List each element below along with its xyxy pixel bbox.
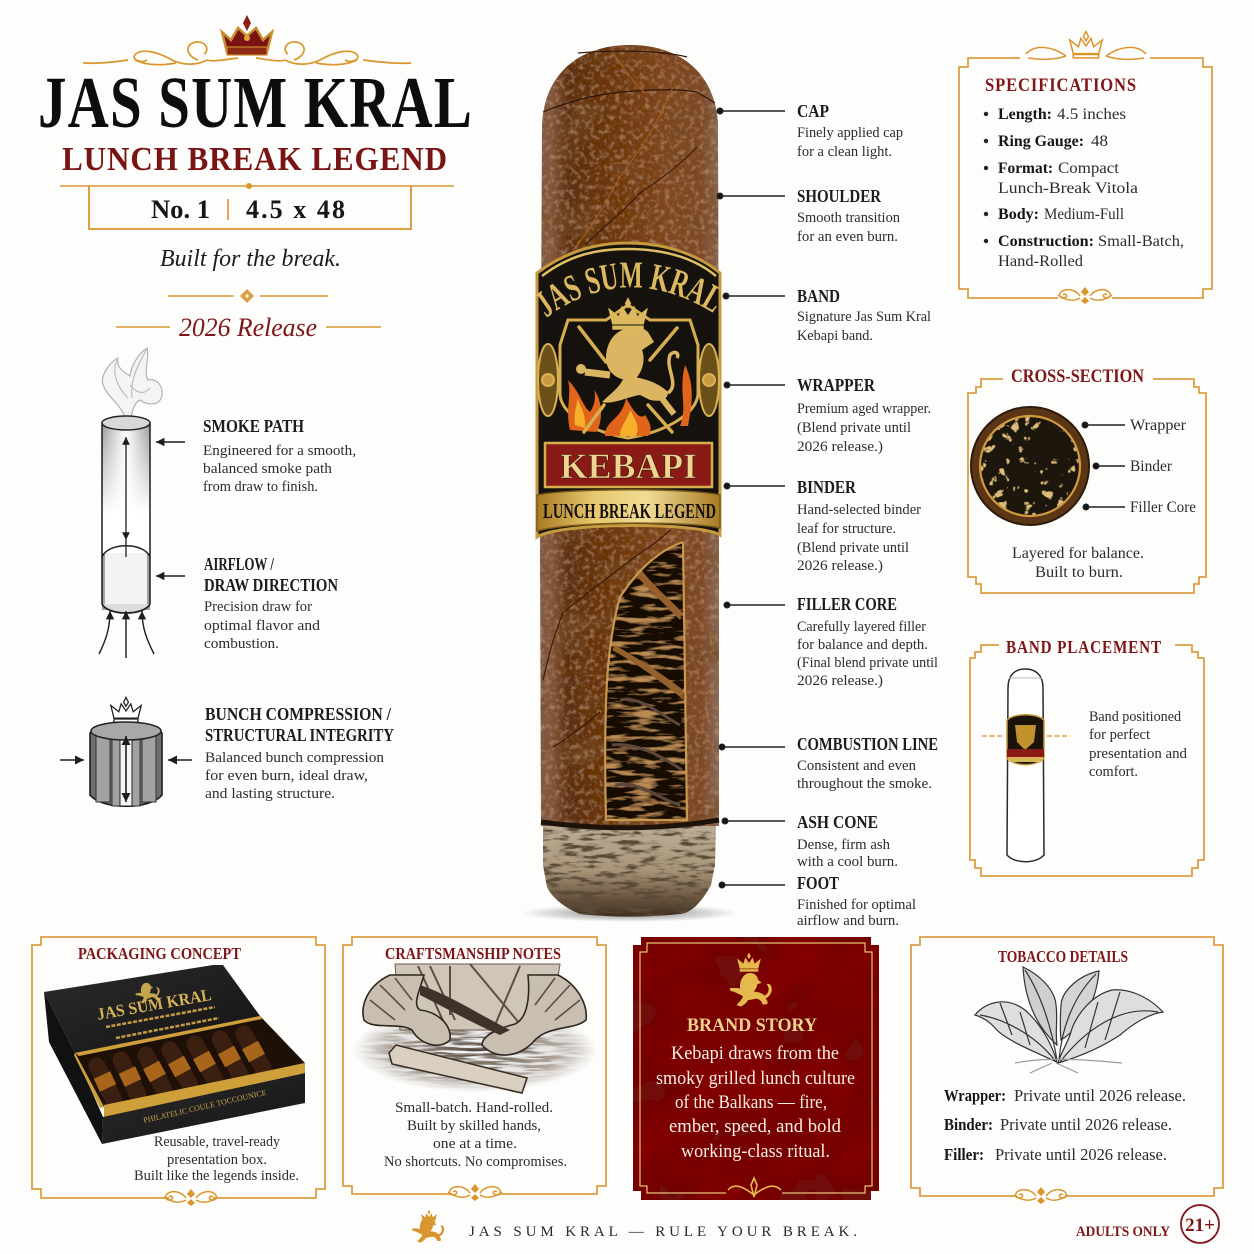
text block: airflow: combustion. [204,636,279,652]
text: comfort. [1089,764,1138,780]
size box: 4.5 x 48 [246,195,345,224]
panel: packaging concept [32,937,325,1206]
release label: 2026 Release [179,313,317,342]
text block: smoke path: balanced smoke path [203,461,333,477]
tobacco list: Wrapper: [944,1086,1006,1105]
text block: bunch compression: and lasting structure. [205,786,335,802]
spec list: Ring Gauge: [998,133,1084,150]
callout: filler core [797,594,938,689]
text: Band positioned [1089,709,1181,725]
panel: band placement [970,637,1204,876]
spec list: Compact [1058,160,1120,177]
callout: binder: Hand-selected binder [797,502,921,518]
age badge [1181,1205,1219,1243]
kebapi banner [545,443,712,487]
text block: smoke path: from draw to finish. [203,479,318,495]
callout: band [797,286,931,344]
title: JAS SUM KRAL [38,62,473,143]
subtitle: LUNCH BREAK LEGEND [62,141,448,178]
callout: binder [797,477,921,574]
callout: wrapper: 2026 release.) [797,439,883,455]
callout: shoulder: Smooth transition [797,210,900,226]
illustration: cigar box: JAS SUM KRAL [95,985,213,1024]
caption [384,1100,567,1170]
right arm [482,975,586,1055]
box interior [75,1016,305,1107]
ash foot [543,823,716,917]
icon: bunch compression diagram [60,697,192,806]
spec list: Small-Batch, [1098,233,1184,250]
icon: gold flourish [728,1178,781,1197]
illustration: cigar box [44,965,305,1144]
illustration: tobacco plant [975,967,1163,1073]
callout: foot: FOOT [797,873,839,893]
wrapper veins [541,51,719,828]
spec list: Format: [998,160,1053,177]
placement dashes [982,735,1070,737]
callout: ash cone: ASH CONE [797,812,878,832]
spec list: Medium-Full [1044,206,1125,223]
text block: airflow [204,554,338,652]
caption [134,1134,299,1184]
story text: Kebapi draws from the [671,1043,839,1064]
heading: CROSS-SECTION [1011,367,1145,387]
icon: crowned lion [730,952,772,1007]
callout: foot: airflow and burn. [797,913,899,929]
box left side [44,992,103,1144]
icon: scroll ornament [164,1189,218,1206]
spec list [984,106,1184,270]
text block: bunch compression: for even burn, ideal draw, [205,768,368,784]
callout: binder: 2026 release.) [797,558,883,574]
icon: scroll ornament [448,1184,502,1201]
crest shield [560,305,698,438]
gold rim [74,1016,305,1117]
callout: filler core: FILLER CORE [797,594,897,614]
spec list: Length: [998,106,1052,123]
story text: working-class ritual. [681,1141,830,1162]
callout: foot: Finished for optimal [797,897,916,913]
story text: of the Balkans — fire, [675,1092,827,1113]
callout: combustion line [797,734,938,792]
text [1089,709,1187,780]
caption: Reusable, travel-ready [154,1134,280,1150]
text block: smoke path: Engineered for a smooth, [203,443,356,459]
band name [546,287,718,318]
lid emblem [134,981,161,1004]
panel: specifications [959,32,1212,304]
footer [412,1205,1219,1243]
story text: ember, speed, and bold [669,1116,841,1137]
icon: scroll ornament [1058,287,1112,304]
spec list: Hand-Rolled [998,253,1083,270]
callout: filler core: for balance and depth. [797,637,928,653]
tobacco list: Private until 2026 release. [1014,1086,1186,1105]
panel: cross-section [968,367,1206,593]
text block: bunch compression: Balanced bunch compression [205,750,385,766]
heading: CRAFTSMANSHIP NOTES [385,944,561,963]
wrapper [540,45,719,826]
tobacco list: Filler: [944,1145,984,1164]
illustration: hands rolling tobacco [353,964,597,1093]
callout: wrapper: Premium aged wrapper. [797,401,931,417]
story text [656,1043,855,1162]
text block: airflow: Precision draw for [204,599,312,615]
tobacco list: Binder: [944,1115,993,1134]
size box: No. 1 [151,195,210,224]
icon: footer lion [412,1210,444,1243]
callout leaders [717,108,785,888]
tobacco leaf [420,985,510,1035]
text block: smoke path: SMOKE PATH [203,416,304,436]
lion crown [608,297,648,330]
tagline: Built for the break. [160,246,341,272]
heading: BAND PLACEMENT [1006,637,1162,657]
arrows into tube [99,442,185,658]
box front [102,1073,305,1144]
mini cigar [1007,669,1044,862]
lunch break strip [537,490,720,531]
rolling board [389,1045,527,1093]
text block: bunch compression: STRUCTURAL INTEGRITY [205,725,394,745]
caption: Built by skilled hands, [407,1118,541,1134]
cross-section leaders [1082,422,1125,510]
filler core cutaway [605,542,687,820]
box lid [44,965,260,1053]
cross-section labels: Binder [1130,458,1173,475]
callout: ash cone [797,812,898,870]
callout: ash cone: with a cool burn. [797,854,898,870]
caption: Built to burn. [1035,564,1123,581]
callout: band: Signature Jas Sum Kral [797,309,931,325]
illustration: cigar box: PHILATELIC COULE TOCCOUNICE [142,1088,267,1125]
heading: BRAND STORY [687,1016,818,1036]
text block: airflow: DRAW DIRECTION [204,575,338,595]
story text: smoky grilled lunch culture [656,1068,855,1089]
callout: band: BAND [797,286,840,306]
cigars [97,1034,263,1100]
spec list: Lunch-Break Vitola [998,180,1138,197]
spec list: Construction: [998,233,1094,250]
text block: bunch compression [205,704,394,802]
tobacco list: Private until 2026 release. [1000,1115,1172,1134]
tobacco list [944,1086,1186,1164]
torso [395,964,560,1030]
callout: binder: (Blend private until [797,540,909,556]
text block: smoke path [203,416,356,495]
text block: airflow: optimal flavor and [204,618,321,634]
caption: Layered for balance. [1012,545,1144,562]
callout: binder: BINDER [797,477,856,497]
caption: one at a time. [433,1136,517,1152]
caption: Built like the legends inside. [134,1168,299,1184]
side rosettes [538,344,719,416]
cross-section labels: Wrapper [1130,417,1187,434]
text block: airflow: AIRFLOW / [204,554,275,574]
cigar band: LUNCH BREAK LEGEND [543,499,716,523]
callout: cap: CAP [797,101,829,121]
callout: ash cone: Dense, firm ash [797,837,890,853]
heading: PACKAGING CONCEPT [78,944,242,963]
caption: Small-batch. Hand-rolled. [395,1100,553,1116]
age badge: 21+ [1185,1215,1215,1236]
callout: binder: leaf for structure. [797,521,896,537]
callout: cap: for a clean light. [797,144,892,160]
left arm [363,975,450,1045]
callout: filler core: 2026 release.) [797,673,883,689]
adults only: ADULTS ONLY [1076,1224,1170,1240]
cross-section disc [971,407,1089,525]
flames [568,365,692,436]
icon: smoke path tube diagram [99,348,185,658]
text: presentation and [1089,746,1187,762]
cigar band [535,242,722,540]
cigar band: JAS SUM KRAL [535,262,720,318]
callout: foot [797,873,916,929]
callout: shoulder [797,186,900,245]
smoke wisps [102,348,162,422]
panel: craftsmanship notes [343,937,606,1201]
callout: filler core: (Final blend private until [797,655,938,671]
callout: combustion line: throughout the smoke. [797,776,932,792]
cigar [535,45,722,917]
caption: No shortcuts. No compromises. [384,1154,567,1170]
footer slogan: JAS SUM KRAL — RULE YOUR BREAK. [469,1224,857,1240]
callout: filler core: Carefully layered filler [797,619,926,635]
callout: band: Kebapi band. [797,328,873,344]
logo header: crown and scrolls [83,15,411,65]
cigar band: KEBAPI [560,446,697,486]
heading: TOBACCO DETAILS [998,947,1128,966]
text block: bunch compression: BUNCH COMPRESSION / [205,704,392,724]
icon: red and gold crown [222,15,272,55]
spec list: Body: [998,206,1039,223]
caption: presentation box. [167,1152,267,1168]
tobacco list: Private until 2026 release. [995,1145,1167,1164]
callout: combustion line: COMBUSTION LINE [797,734,938,754]
callout: shoulder: SHOULDER [797,186,881,206]
callout: wrapper: (Blend private until [797,420,911,436]
callout: wrapper: WRAPPER [797,375,875,395]
icon: crown ornament [1026,32,1146,59]
callout: cap: Finely applied cap [797,125,903,141]
panel: brand story [633,937,879,1200]
callout: shoulder: for an even burn. [797,229,898,245]
spears [579,327,677,432]
callout: wrapper [797,375,931,455]
caption [1012,545,1144,581]
lion [576,328,678,414]
panel: tobacco details [911,937,1223,1204]
callout: combustion line: Consistent and even [797,758,916,774]
callout: cap [797,101,903,160]
heading: SPECIFICATIONS [985,75,1137,96]
cross-section labels: Filler Core [1130,499,1196,516]
shadow under cigar [520,904,740,922]
icon: scroll ornament [1014,1187,1068,1204]
table shading [353,1008,597,1092]
text: for perfect [1089,727,1151,743]
cross-section labels [1130,417,1196,516]
size box [60,183,454,229]
spec list: 48 [1091,133,1108,150]
ornament divider [168,289,328,303]
spec list: 4.5 inches [1057,106,1126,123]
